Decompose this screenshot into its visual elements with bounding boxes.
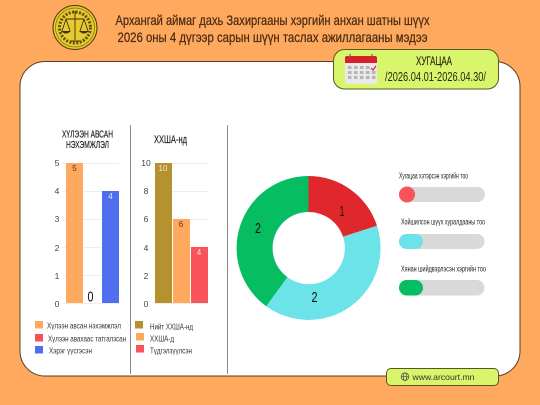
title: 2026 оны 4 дүгээр сарын шүүн таслах ажиллагааны мэдээ: [118, 29, 428, 45]
bar chart: judges: 6: [179, 220, 184, 229]
indicator: overdue cases: Хугацаа хэтэрсэн хэргийн тоо: [399, 172, 468, 180]
legend: chart 1: Хүлээн авахаас татгалзсан: [48, 334, 126, 344]
bar chart: claims: 2: [55, 243, 60, 253]
indicator: decided cases: Хянан шийдвэрлэсэн хэргийн тоо: [401, 264, 486, 274]
legend: chart 1: [35, 320, 126, 356]
bar chart: judges: 0: [144, 299, 149, 309]
indicator: overdue cases: [399, 172, 485, 202]
period badge: [334, 50, 498, 89]
bar chart: judges: 2: [144, 271, 149, 281]
bar chart: claims: [55, 158, 119, 309]
donut chart: [237, 176, 381, 320]
legend: chart 1: Хүлээн авсан нэхэмжлэл: [47, 320, 121, 330]
heading: chart 1: [62, 130, 113, 151]
donut chart: 2: [255, 220, 261, 237]
heading: chart 2: ХХША-нд: [154, 134, 187, 146]
bar chart: judges: [141, 158, 208, 309]
bar chart: judges: 10: [141, 158, 151, 168]
title: Архангай аймаг дахь Захиргааны хэргийн анхан шатны шүүх: [116, 12, 430, 28]
heading: chart 1: ХҮЛЭЭН АВСАН: [62, 130, 113, 140]
icon: calendar: [345, 54, 377, 84]
bar chart: judges: 4: [197, 248, 202, 257]
legend: chart 1: Хэрэг үүсгэсэн: [49, 346, 92, 356]
donut chart: 2: [312, 289, 318, 306]
bar chart: judges: 10: [159, 164, 168, 173]
bar chart: claims: 3: [55, 214, 60, 224]
legend: chart 2: Нийт ХХША-нд: [150, 322, 193, 332]
dividers: [130, 125, 228, 374]
bar chart: judges: 6: [144, 214, 149, 224]
website badge: [386, 368, 498, 386]
period text: [385, 54, 486, 84]
bar chart: claims: 4: [108, 192, 113, 201]
bar chart: claims: 5: [72, 164, 77, 173]
indicator: adjourned hearings: [399, 218, 485, 249]
panel: main white card: [20, 62, 520, 376]
bar chart: claims: 4: [55, 186, 60, 196]
legend: chart 2: [135, 321, 193, 356]
icon: globe: [401, 373, 409, 381]
title: [116, 12, 430, 45]
bar chart: judges: 8: [144, 186, 149, 196]
heading: chart 1: НЭХЭМЖЛЭЛ: [66, 140, 109, 151]
bar chart: claims: 5: [55, 158, 60, 168]
donut chart: 1: [340, 203, 344, 220]
period text: /2026.04.01-2026.04.30/: [385, 70, 486, 84]
indicator: decided cases: [399, 264, 486, 296]
bar chart: claims: 1: [55, 271, 60, 281]
bar chart: claims: 0: [55, 299, 60, 309]
website badge: www.arcourt.mn: [411, 372, 475, 382]
bar chart: judges: 4: [144, 243, 149, 253]
legend: chart 2: Түдгэлзүүлсэн: [150, 346, 192, 356]
legend: chart 2: ХХША-д: [150, 334, 174, 344]
period text: ХУГАЦАА: [416, 54, 452, 68]
bar chart: claims: 0: [88, 288, 94, 306]
indicator: adjourned hearings: Хойшилсон шүүх хуралдааны тоо: [401, 218, 485, 226]
icon: court emblem: [53, 6, 97, 50]
